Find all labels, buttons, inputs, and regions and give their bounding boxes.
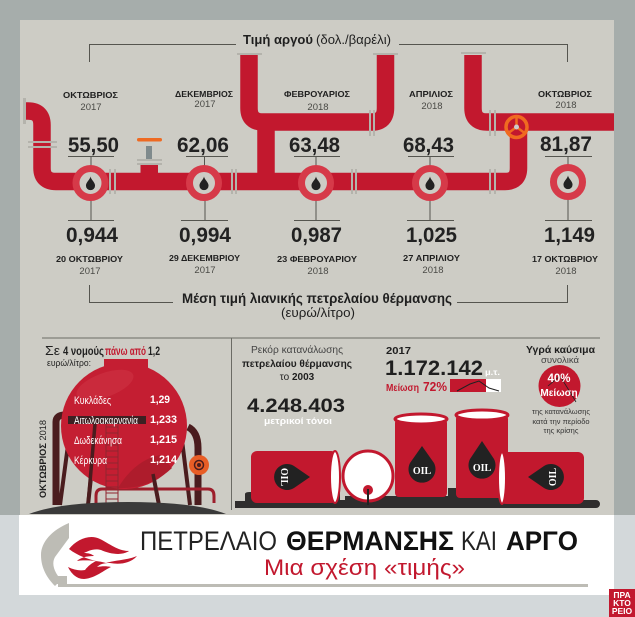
barrel: lying right: OIL [548, 468, 559, 486]
date labels: 2018 [307, 266, 329, 277]
icon: 40 percent circle: Μείωση [540, 388, 578, 399]
tank heading: Σε [45, 343, 60, 358]
text block: 2017 consumption: 72% [423, 379, 447, 394]
heading: crude oil price [90, 32, 568, 62]
month labels: 2017 [194, 99, 216, 110]
date labels: 2018 [422, 265, 444, 276]
crude oil values: 81,87 [540, 133, 592, 156]
oil drop gauges [76, 168, 582, 198]
tank heading: πάνω από [105, 344, 146, 358]
text block: consumption record: πετρελαίου θέρμανσης [242, 359, 352, 370]
tank price table: 1,29 [150, 394, 170, 406]
text block: consumption record [242, 344, 352, 427]
month labels: ΟΚΤΩΒΡΙΟΣ [63, 90, 118, 100]
icon: red tank body [61, 359, 187, 489]
crude oil values: 68,43 [403, 134, 454, 157]
month labels: ΦΕΒΡΟΥΑΡΙΟΣ [284, 89, 350, 99]
text block: liquid fuels decline: Υγρά καύσιμα [526, 344, 596, 356]
text block: 2017 consumption [385, 345, 501, 394]
date labels: 27 ΑΠΡΙΛΙΟΥ [403, 253, 460, 263]
barrel: open end [343, 451, 393, 505]
barrel: upright one [395, 414, 447, 497]
tank price table: 1,233 [150, 414, 177, 426]
main title: ΚΑΙ [461, 526, 497, 556]
tank heading [45, 343, 160, 368]
text block: liquid fuels decline: της κατανάλωσης [532, 407, 590, 416]
barrel: upright two: OIL [473, 463, 491, 474]
date labels: 2017 [79, 266, 101, 277]
date labels: 20 ΟΚΤΩΒΡΙΟΥ [56, 254, 123, 264]
icon: tank legs front [88, 424, 159, 505]
tank price table: Αιτωλοακαρνανία [74, 415, 138, 427]
text block: 2017 consumption: 1.172.142 [385, 357, 483, 380]
heating oil values: 0,987 [291, 224, 342, 247]
month labels: ΟΚΤΩΒΡΙΟΣ [538, 89, 592, 99]
heating oil values: 0,994 [179, 224, 231, 247]
heading: average heating oil retail price: (ευρώ/λίτρο) [281, 305, 355, 320]
heating oil values: 1,149 [544, 224, 595, 247]
date labels: 17 ΟΚΤΩΒΡΙΟΥ [532, 254, 598, 264]
main title: ΘΕΡΜΑΝΣΗΣ [286, 526, 454, 556]
icon: orange valve wheel [506, 116, 527, 138]
subtitle: Μια σχέση «τιμής» [264, 555, 465, 580]
publisher stamp: ΡΕΙΟ [612, 606, 633, 616]
main title: ΠΕΤΡΕΛΑΙΟ [140, 526, 277, 556]
tank price table: Κυκλάδες [74, 395, 111, 407]
illustration: oil barrels [235, 410, 600, 508]
pipe flanges [23, 52, 496, 194]
text block: consumption record: 4.248.403 [247, 396, 345, 417]
month labels: ΔΕΚΕΜΒΡΙΟΣ [175, 89, 233, 99]
text block: 2017 consumption: Μείωση [386, 383, 419, 394]
crude oil values: 62,06 [177, 134, 229, 157]
month labels: 2018 [307, 102, 329, 113]
month labels: 2018 [421, 101, 443, 112]
title band [19, 515, 614, 595]
heading: crude oil price: Τιμή αργού [243, 32, 313, 47]
rotated date label: ΟΚΤΩΒΡΙΟΣ 2018 [38, 420, 48, 498]
heading: crude oil price: (δολ./βαρέλι) [316, 32, 391, 47]
chart: decline bar [450, 379, 501, 392]
tank heading: ευρώ/λίτρο: [47, 358, 91, 368]
icon: tank valve [189, 455, 209, 475]
heating oil values [66, 224, 595, 247]
date labels: 2018 [555, 266, 577, 277]
barrel: upright one: OIL [413, 466, 431, 477]
spilled oil ground [235, 488, 600, 508]
icon: tank base [29, 502, 226, 514]
month labels [63, 89, 592, 113]
tank price table [68, 394, 178, 467]
logo: flame [41, 523, 137, 586]
barrel: lying left [251, 451, 340, 503]
connector lines [68, 156, 592, 220]
heating oil values: 0,944 [66, 224, 118, 247]
text block: 2017 consumption: μ.τ. [485, 368, 500, 377]
text block: liquid fuels decline [526, 344, 596, 435]
barrel: lying left: OIL [278, 468, 289, 486]
tank price table: Δωδεκάνησα [74, 435, 122, 447]
crude oil values: 63,48 [289, 134, 340, 157]
publisher stamp: ΠΡΑ [613, 590, 631, 600]
main title: ΑΡΓΟ [506, 526, 578, 556]
tank price table: Κέρκυρα [74, 455, 107, 467]
main title [140, 526, 578, 556]
month labels: 2018 [555, 100, 577, 111]
tank heading: 4 νομούς [63, 344, 104, 358]
date labels: 23 ΦΕΒΡΟΥΑΡΙΟΥ [277, 254, 357, 264]
date labels: 2017 [194, 265, 216, 276]
crude oil values: 55,50 [68, 134, 119, 157]
heating oil values: 1,025 [406, 224, 457, 247]
date labels: 29 ΔΕΚΕΜΒΡΙΟΥ [169, 253, 240, 263]
text block: consumption record: μετρικοί τόνοι [264, 416, 332, 427]
barrel: lying right [498, 452, 584, 504]
publisher stamp [609, 589, 635, 617]
barrel: upright two [456, 410, 508, 498]
icon: gate valve [137, 138, 162, 165]
text block: consumption record: Ρεκόρ κατανάλωσης [251, 344, 343, 356]
text block: liquid fuels decline: συνολικά [541, 355, 579, 366]
crude oil values [68, 133, 592, 157]
text block: 2017 consumption: 2017 [386, 345, 411, 357]
tank heading: 1,2 [148, 344, 160, 358]
tank price table: 1,214 [150, 454, 178, 466]
tank price table: 1,215 [150, 434, 177, 446]
heading: average heating oil retail price: Μέση τιμή λιανικής πετρελαίου θέρμανσης [182, 291, 452, 306]
text block: consumption record: το 2003 [280, 372, 315, 383]
month labels: 2017 [80, 102, 102, 113]
icon: 40 percent circle: 40% [547, 373, 571, 385]
panel: storage tank [29, 343, 226, 514]
month labels: ΑΠΡΙΛΙΟΣ [409, 89, 453, 99]
icon: ladder [106, 423, 118, 503]
text block: liquid fuels decline: κατά την περίοδο [532, 417, 590, 426]
pipeline network [23, 52, 614, 194]
publisher stamp: ΚΤΟ [613, 598, 631, 608]
text block: liquid fuels decline: της κρίσης [544, 426, 579, 435]
date labels [56, 253, 598, 277]
icon: 40 percent circle [538, 365, 580, 407]
icon: tank pipes and legs [56, 415, 214, 505]
heading: average heating oil retail price [90, 285, 568, 320]
